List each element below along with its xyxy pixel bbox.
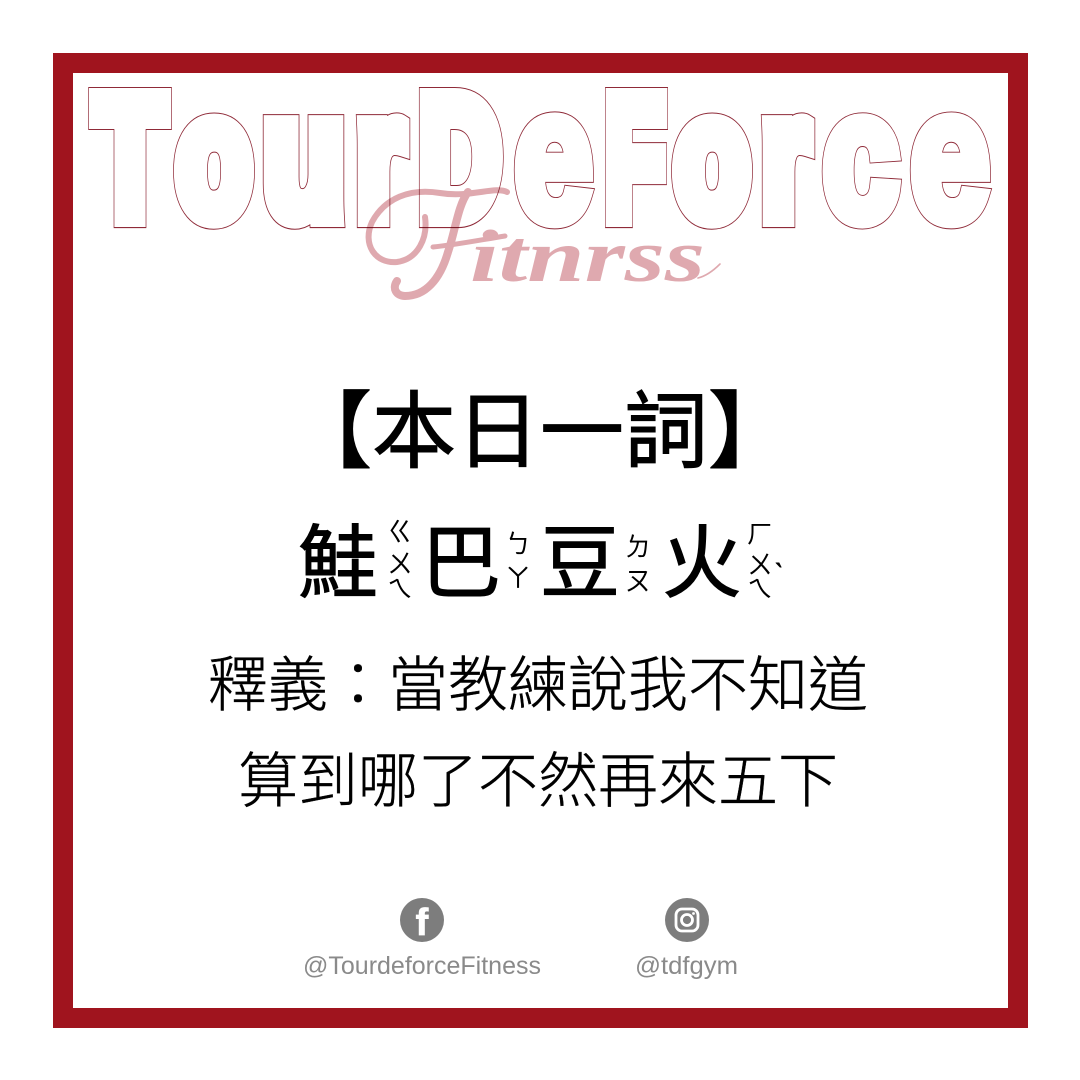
logo: TourDeForce outlined wordmark: o xyxy=(675,63,749,253)
instagram handle: @tdfgym xyxy=(635,952,738,980)
definition text: 算到哪了不然再來五下 xyxy=(238,748,838,815)
term: 鮭巴豆火 with bopomofo: 豆 xyxy=(540,519,620,608)
logo: TourDeForce outlined wordmark xyxy=(95,51,990,261)
logo: TourDeForce outlined wordmark: D xyxy=(419,63,500,253)
term: 鮭巴豆火 with bopomofo: 巴 xyxy=(421,519,501,608)
icon: instagram xyxy=(665,898,709,942)
logo: TourDeForce outlined wordmark: c xyxy=(823,56,899,259)
logo: TourDeForce outlined wordmark: e xyxy=(514,51,593,261)
logo: TourDeForce outlined wordmark: F xyxy=(606,64,665,253)
logo: TourDeForce outlined wordmark: F xyxy=(606,64,665,253)
logo: TourDeForce outlined wordmark: r xyxy=(357,63,404,253)
red frame xyxy=(63,63,1018,1018)
logo: TourDeForce outlined wordmark: e xyxy=(910,52,990,260)
logo: TourDeForce outlined wordmark: e xyxy=(910,52,990,260)
facebook handle: @TourdeforceFitness xyxy=(303,952,541,980)
logo: TourDeForce outlined wordmark: r xyxy=(357,63,404,253)
term: 鮭巴豆火 with bopomofo: 火 xyxy=(662,519,742,608)
heading: 本日一詞: 【本日一詞】 xyxy=(288,385,792,479)
logo: Fitnrss script overlay xyxy=(369,190,720,298)
term: 鮭巴豆火 with bopomofo: ㄅ xyxy=(505,529,531,559)
term: 鮭巴豆火 with bopomofo: ˋ xyxy=(773,556,785,597)
definition text xyxy=(208,652,868,815)
logo: TourDeForce outlined wordmark: u xyxy=(264,64,344,253)
term: 鮭巴豆火 with bopomofo xyxy=(298,517,785,608)
icon: facebook: f xyxy=(416,902,429,944)
logo: TourDeForce outlined wordmark: o xyxy=(675,63,749,253)
logo: TourDeForce outlined wordmark: o xyxy=(177,63,251,253)
logo: Fitnrss script overlay: itnrss xyxy=(470,216,705,298)
logo: TourDeForce outlined wordmark: o xyxy=(177,63,251,253)
term: 鮭巴豆火 with bopomofo: ㄚ xyxy=(505,563,531,593)
term: 鮭巴豆火 with bopomofo: ㄟ xyxy=(387,574,413,604)
term: 鮭巴豆火 with bopomofo: 鮭 xyxy=(298,519,378,608)
term: 鮭巴豆火 with bopomofo: ㄡ xyxy=(625,566,651,596)
term: 鮭巴豆火 with bopomofo: ㄏ xyxy=(747,519,773,549)
term: 鮭巴豆火 with bopomofo: ㄨ xyxy=(387,549,413,579)
logo: TourDeForce outlined wordmark: r xyxy=(762,63,809,253)
logo: TourDeForce outlined wordmark: u xyxy=(264,64,344,253)
term: 鮭巴豆火 with bopomofo: ㄨ xyxy=(747,550,773,580)
logo: TourDeForce outlined wordmark: c xyxy=(823,56,899,259)
logo: TourDeForce outlined wordmark: r xyxy=(762,63,809,253)
icon: facebook xyxy=(400,898,444,944)
term: 鮭巴豆火 with bopomofo: ㄍ xyxy=(387,517,413,547)
logo: TourDeForce outlined wordmark: D xyxy=(419,63,500,253)
term: 鮭巴豆火 with bopomofo: ㄟ xyxy=(747,574,773,604)
term: 鮭巴豆火 with bopomofo: ㄉ xyxy=(625,532,651,562)
logo: TourDeForce outlined wordmark: e xyxy=(514,51,593,261)
logo: TourDeForce outlined wordmark: T xyxy=(95,62,165,252)
definition text: 釋義：當教練說我不知道 xyxy=(208,652,868,719)
logo: TourDeForce outlined wordmark: T xyxy=(95,62,165,252)
